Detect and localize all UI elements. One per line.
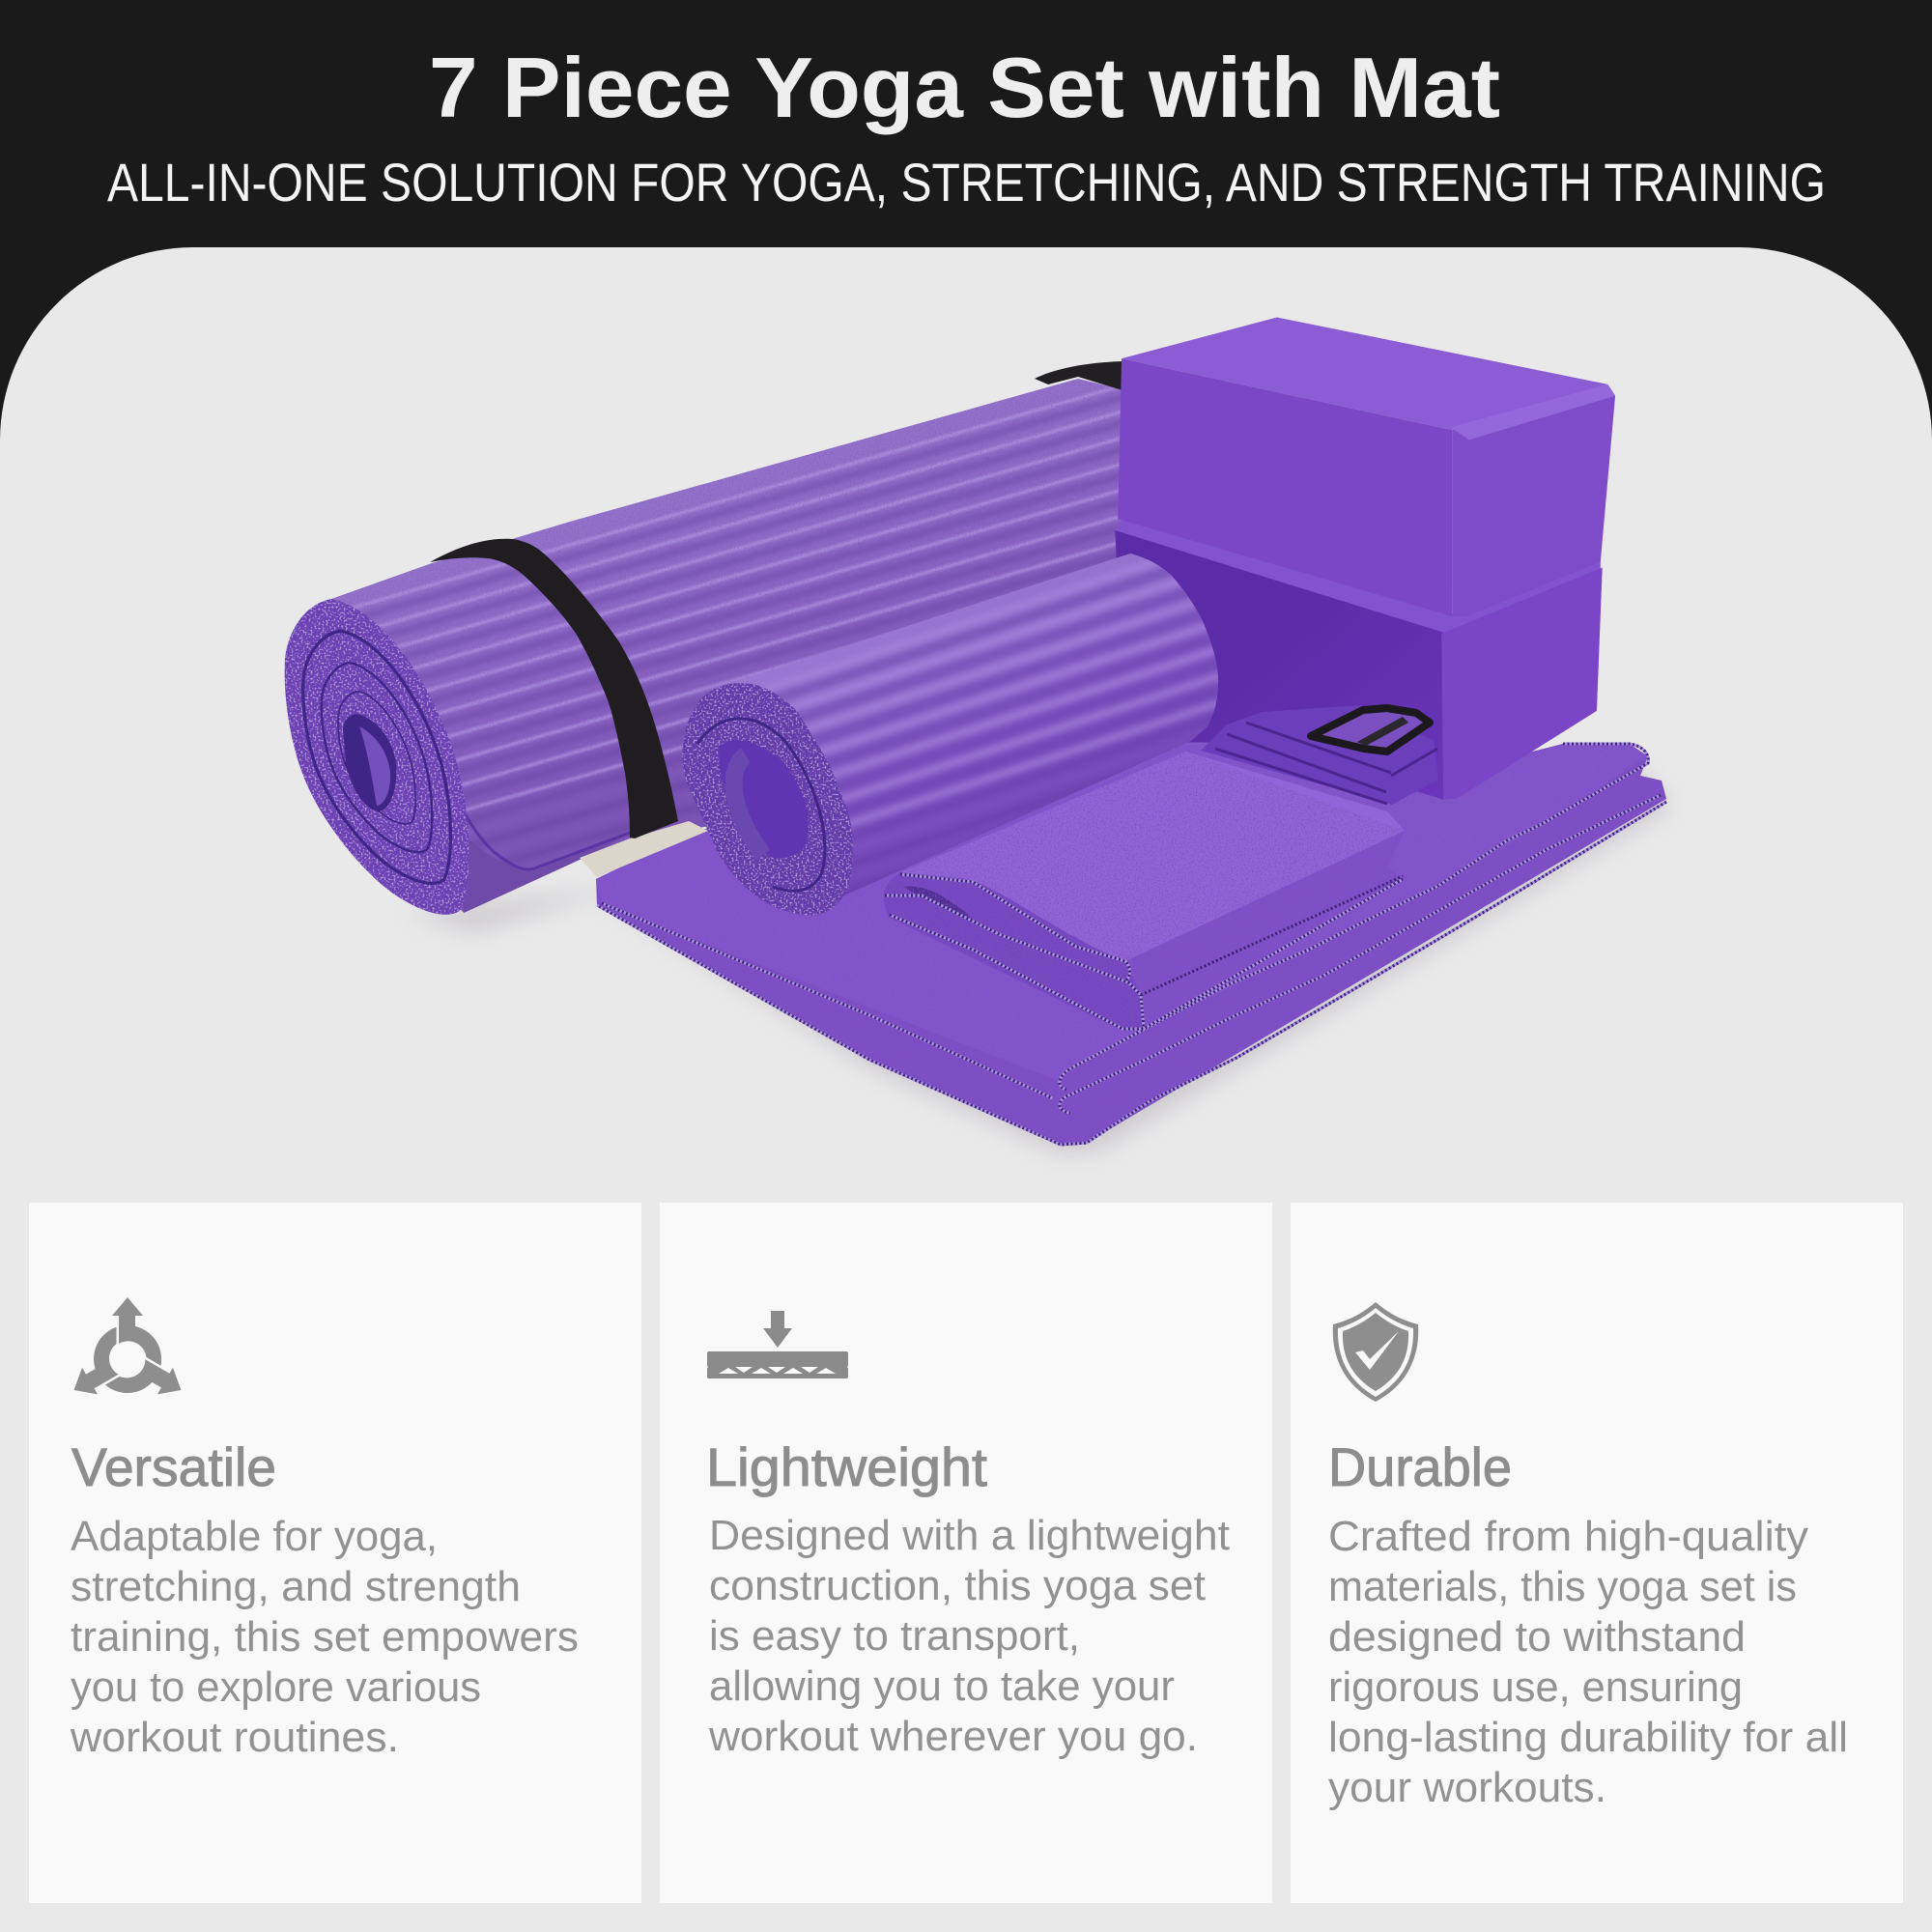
body text: Lightweight: allowing you to take your <box>709 1662 1175 1710</box>
heading: Durable: Durable <box>1328 1436 1512 1497</box>
body text: Versatile: workout routines. <box>70 1714 399 1761</box>
roller body <box>729 554 1218 895</box>
large towel <box>596 734 1666 1145</box>
mat flap edge <box>459 802 630 869</box>
body text: Versatile: Adaptable for yoga, <box>71 1513 438 1560</box>
body text: Durable: your workouts. <box>1328 1764 1606 1811</box>
title: 7 Piece Yoga Set with Mat <box>429 40 1500 135</box>
roller ribs <box>763 560 1218 895</box>
body text: Durable: rigorous use, ensuring <box>1328 1663 1743 1711</box>
mat end rings <box>303 631 450 883</box>
body text: Versatile: you to explore various <box>71 1663 481 1711</box>
roller core <box>719 741 809 858</box>
body text: Lightweight <box>708 1512 1230 1760</box>
roller inner layer <box>734 755 763 855</box>
mat texture <box>331 379 1130 913</box>
card: Versatile <box>29 1203 641 1903</box>
body text: Durable: designed to withstand <box>1328 1613 1746 1661</box>
body text: Versatile: stretching, and strength <box>71 1563 521 1610</box>
body text: Lightweight: workout wherever you go. <box>708 1713 1198 1760</box>
heading: Versatile: Versatile <box>71 1436 276 1497</box>
mat end grain <box>285 599 469 915</box>
body text: Durable: long-lasting durability for all <box>1328 1714 1848 1761</box>
floor shadow <box>406 773 1671 1154</box>
folded strap with buckle <box>1201 705 1438 805</box>
roller spiral line <box>697 719 825 891</box>
yoga blocks <box>1115 317 1615 800</box>
lower block <box>1115 516 1603 800</box>
mat end face <box>285 599 469 915</box>
body text: Lightweight: construction, this yoga set <box>709 1562 1206 1609</box>
card: Lightweight <box>660 1203 1272 1903</box>
buckle <box>1311 708 1430 752</box>
icon: shield with check <box>1333 1302 1418 1402</box>
icon: three-way arrows <box>57 1297 188 1419</box>
mat lower layer <box>462 831 628 913</box>
mat core hole <box>343 714 396 811</box>
body text: Durable <box>1328 1513 1848 1811</box>
large rolled mat <box>285 361 1159 951</box>
body text: Versatile <box>70 1513 579 1761</box>
body text: Durable: Crafted from high-quality <box>1328 1513 1808 1560</box>
heading: Lightweight: Lightweight <box>706 1436 987 1497</box>
towel fold edges <box>597 744 1666 1145</box>
small rolled mat <box>682 554 1219 916</box>
icon: weight on surface <box>707 1311 848 1378</box>
back strap <box>1035 361 1125 391</box>
body text: Lightweight: Designed with a lightweight <box>709 1512 1230 1559</box>
roller end face <box>682 683 853 916</box>
mat ribs <box>352 386 1121 883</box>
body text: Versatile: training, this set empowers <box>71 1613 579 1661</box>
towel layers <box>885 874 1403 1029</box>
beige gap <box>580 821 708 877</box>
mat body <box>331 379 1130 913</box>
small folded towel <box>884 752 1405 1031</box>
product photo: yoga set <box>285 317 1671 1154</box>
upper block <box>1118 317 1615 616</box>
header band <box>0 0 1932 444</box>
black strap band <box>430 539 678 838</box>
body text: Lightweight: is easy to transport, <box>709 1612 1080 1660</box>
buckle bar <box>1357 717 1408 746</box>
mat core inner layer <box>359 726 390 806</box>
body text: Durable: materials, this yoga set is <box>1328 1563 1797 1610</box>
roller end grain <box>682 683 853 916</box>
card: Durable <box>1291 1203 1903 1903</box>
